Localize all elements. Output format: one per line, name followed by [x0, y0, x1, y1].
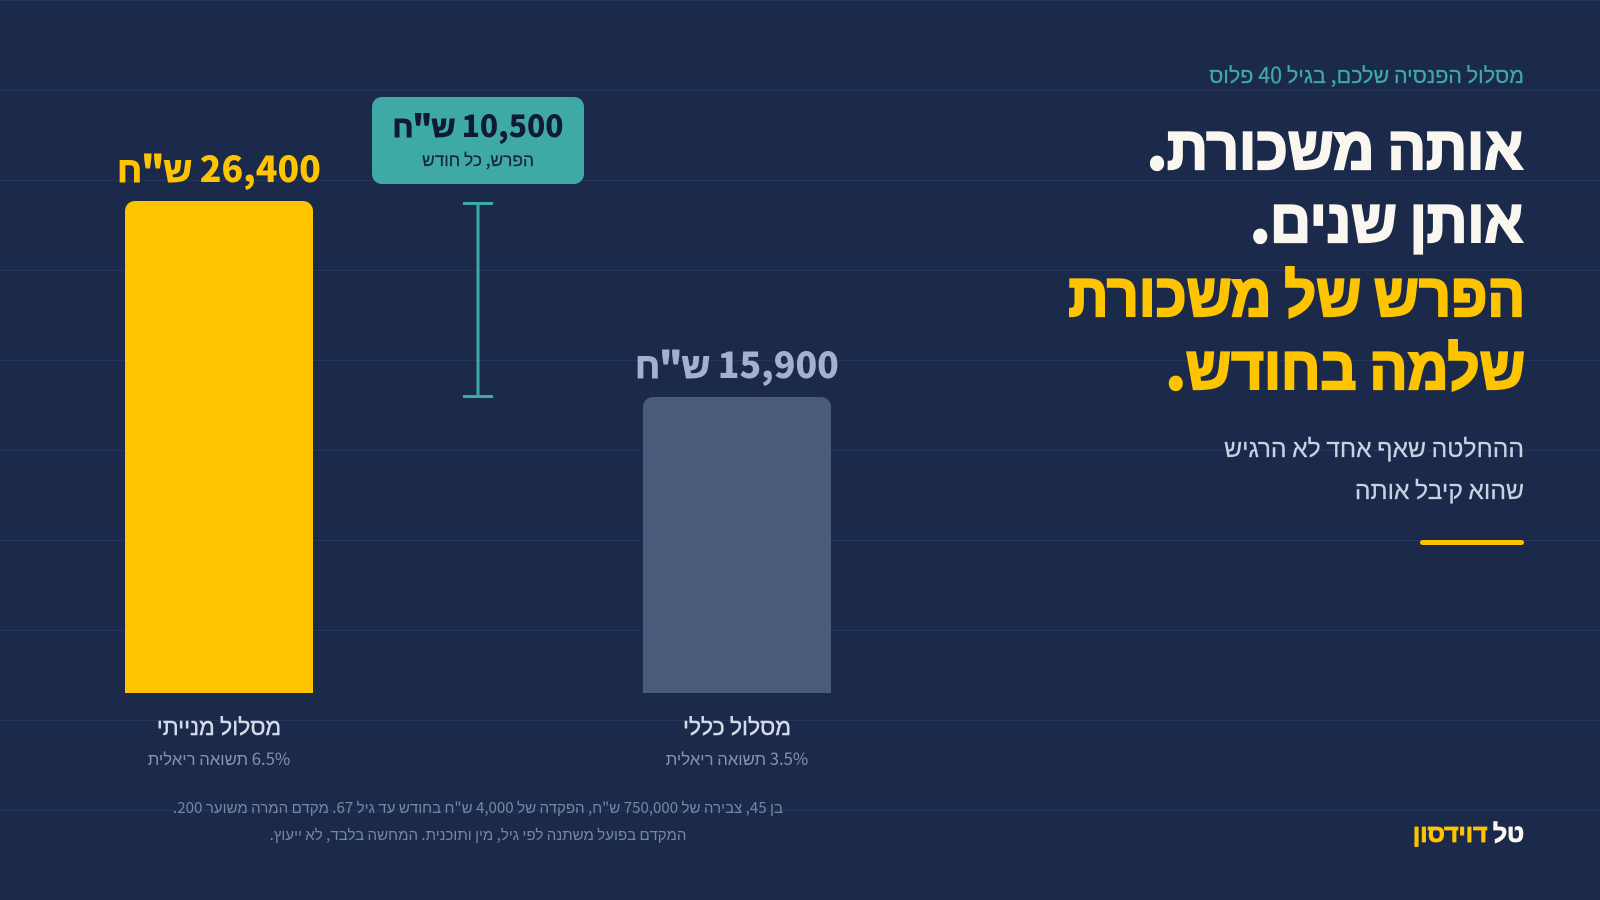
bar chart	[117, 97, 839, 770]
label: investment track: מסלול מנייתי	[157, 708, 281, 742]
gap bracket	[463, 202, 493, 398]
footnote: בן 45, צבירה של 750,000 ש"ח, הפקדה של 4,000 ש"ח בחודש עד גיל 67. מקדם המרה משוער 200.	[173, 796, 783, 818]
footnote: המקדם בפועל משתנה לפי גיל, מין ותוכנית. המחשה בלבד, לא ייעוץ.	[270, 823, 686, 845]
title: שלמה בחודש.	[1166, 320, 1525, 407]
brand: טל דוידסון	[1413, 814, 1524, 850]
callout caption: הפרש, כל חודש	[422, 146, 534, 171]
value: investment track: 26,400 ש"ח	[117, 142, 321, 192]
title: אותן שנים.	[1250, 173, 1523, 260]
bar: general track	[643, 397, 831, 693]
accent rule	[1420, 540, 1524, 545]
callout value: 10,500 ש"ח	[392, 102, 564, 146]
subtitle: ההחלטה שאף אחד לא הרגיש	[1224, 429, 1524, 465]
bar: investment track	[125, 201, 313, 693]
value: general track: 15,900 ש"ח	[635, 338, 839, 388]
sublabel: general track: 3.5% תשואה ריאלית	[666, 746, 808, 770]
footnote	[173, 796, 783, 845]
subtitle: שהוא קיבל אותה	[1355, 471, 1524, 507]
title	[1068, 100, 1525, 407]
callout: difference	[372, 97, 584, 184]
eyebrow: מסלול הפנסיה שלכם, בגיל 40 פלוס	[1209, 59, 1524, 90]
title: אותה משכורת.	[1147, 100, 1523, 186]
title: הפרש של משכורת	[1068, 246, 1525, 334]
subtitle	[1224, 429, 1524, 507]
label: general track: מסלול כללי	[683, 708, 791, 742]
sublabel: investment track: 6.5% תשואה ריאלית	[148, 746, 290, 770]
